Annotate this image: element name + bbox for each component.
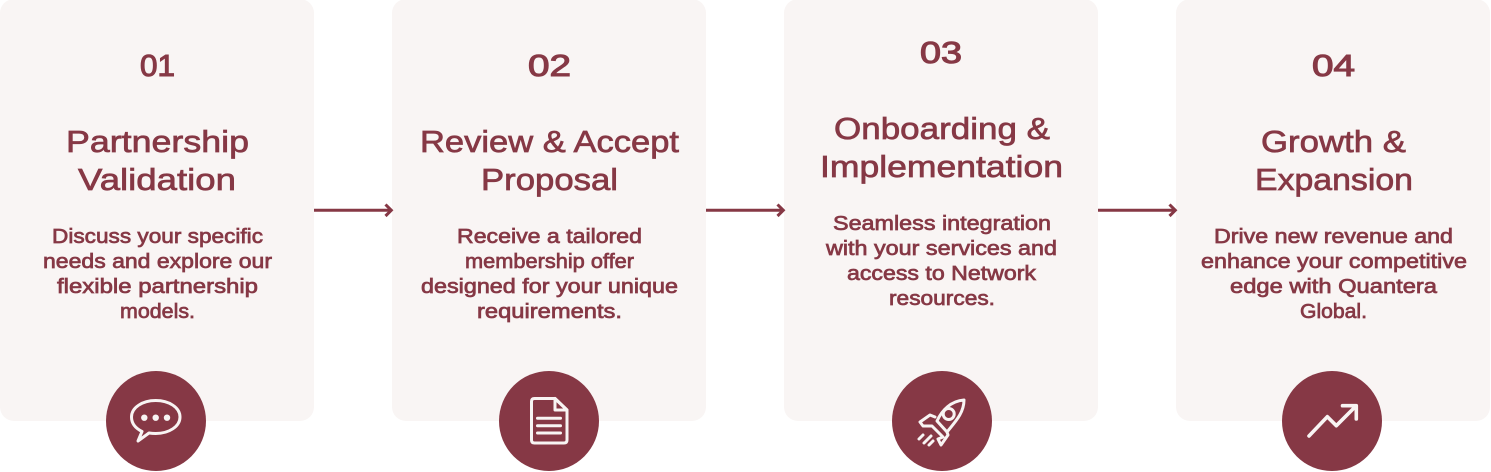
icon: document (499, 371, 599, 471)
step number 02: 02 (528, 48, 571, 83)
description 4: Global. (1300, 301, 1367, 323)
panel: step 1 (0, 0, 314, 471)
heading: Review & Accept Proposal (420, 124, 679, 197)
description 1: Discuss your specific (52, 226, 263, 248)
arrow 3 to 4 (1098, 204, 1175, 216)
step number 04: 04 (1312, 48, 1355, 83)
description 1 (43, 226, 272, 323)
icon: speech bubble (106, 371, 206, 471)
arrow 2 to 3 (706, 204, 783, 216)
description 3: with your services and (825, 238, 1057, 260)
description 3 (825, 213, 1057, 310)
description 2 (421, 226, 678, 323)
heading: Onboarding & Implementation: Implementation (820, 149, 1063, 184)
description 2: membership offer (465, 251, 634, 273)
description 3: resources. (889, 288, 995, 310)
icon: rocket (892, 371, 992, 471)
heading: Growth & Expansion: Growth & (1261, 124, 1406, 159)
heading: Partnership Validation (66, 124, 249, 197)
icon: growth arrow (1282, 371, 1382, 471)
description 1: models. (120, 301, 195, 323)
description 4: enhance your competitive (1201, 251, 1467, 273)
heading: Onboarding & Implementation: Onboarding & (834, 111, 1050, 146)
description 4 (1201, 226, 1467, 323)
description 1: needs and explore our (43, 251, 272, 273)
description 2: requirements. (477, 301, 622, 323)
heading: Growth & Expansion: Expansion (1255, 162, 1413, 197)
description 2: Receive a tailored (457, 226, 642, 248)
heading: Review & Accept Proposal: Review & Accept (420, 124, 679, 159)
heading: Review & Accept Proposal: Proposal (481, 162, 618, 197)
panel: step 3 (784, 0, 1098, 471)
panel: step 4 (1176, 0, 1490, 471)
description 4: edge with Quantera (1230, 276, 1438, 298)
panel background 4 (1176, 0, 1490, 421)
heading: Partnership Validation: Validation (78, 162, 236, 197)
heading: Partnership Validation: Partnership (66, 124, 249, 159)
description 3: Seamless integration (833, 213, 1051, 235)
heading: Growth & Expansion (1255, 124, 1413, 197)
panel background 3 (784, 0, 1098, 421)
step number 01: 01 (140, 48, 175, 83)
description 2: designed for your unique (421, 276, 678, 298)
description 4: Drive new revenue and (1214, 226, 1453, 248)
heading: Onboarding & Implementation (820, 111, 1063, 184)
panel background 2 (392, 0, 706, 421)
step number 03: 03 (920, 35, 962, 70)
arrow 1 to 2 (314, 204, 391, 216)
description 1: flexible partnership (57, 276, 258, 298)
description 3: access to Network (847, 263, 1037, 285)
panel background 1 (0, 0, 314, 421)
panel: step 2 (392, 0, 706, 471)
